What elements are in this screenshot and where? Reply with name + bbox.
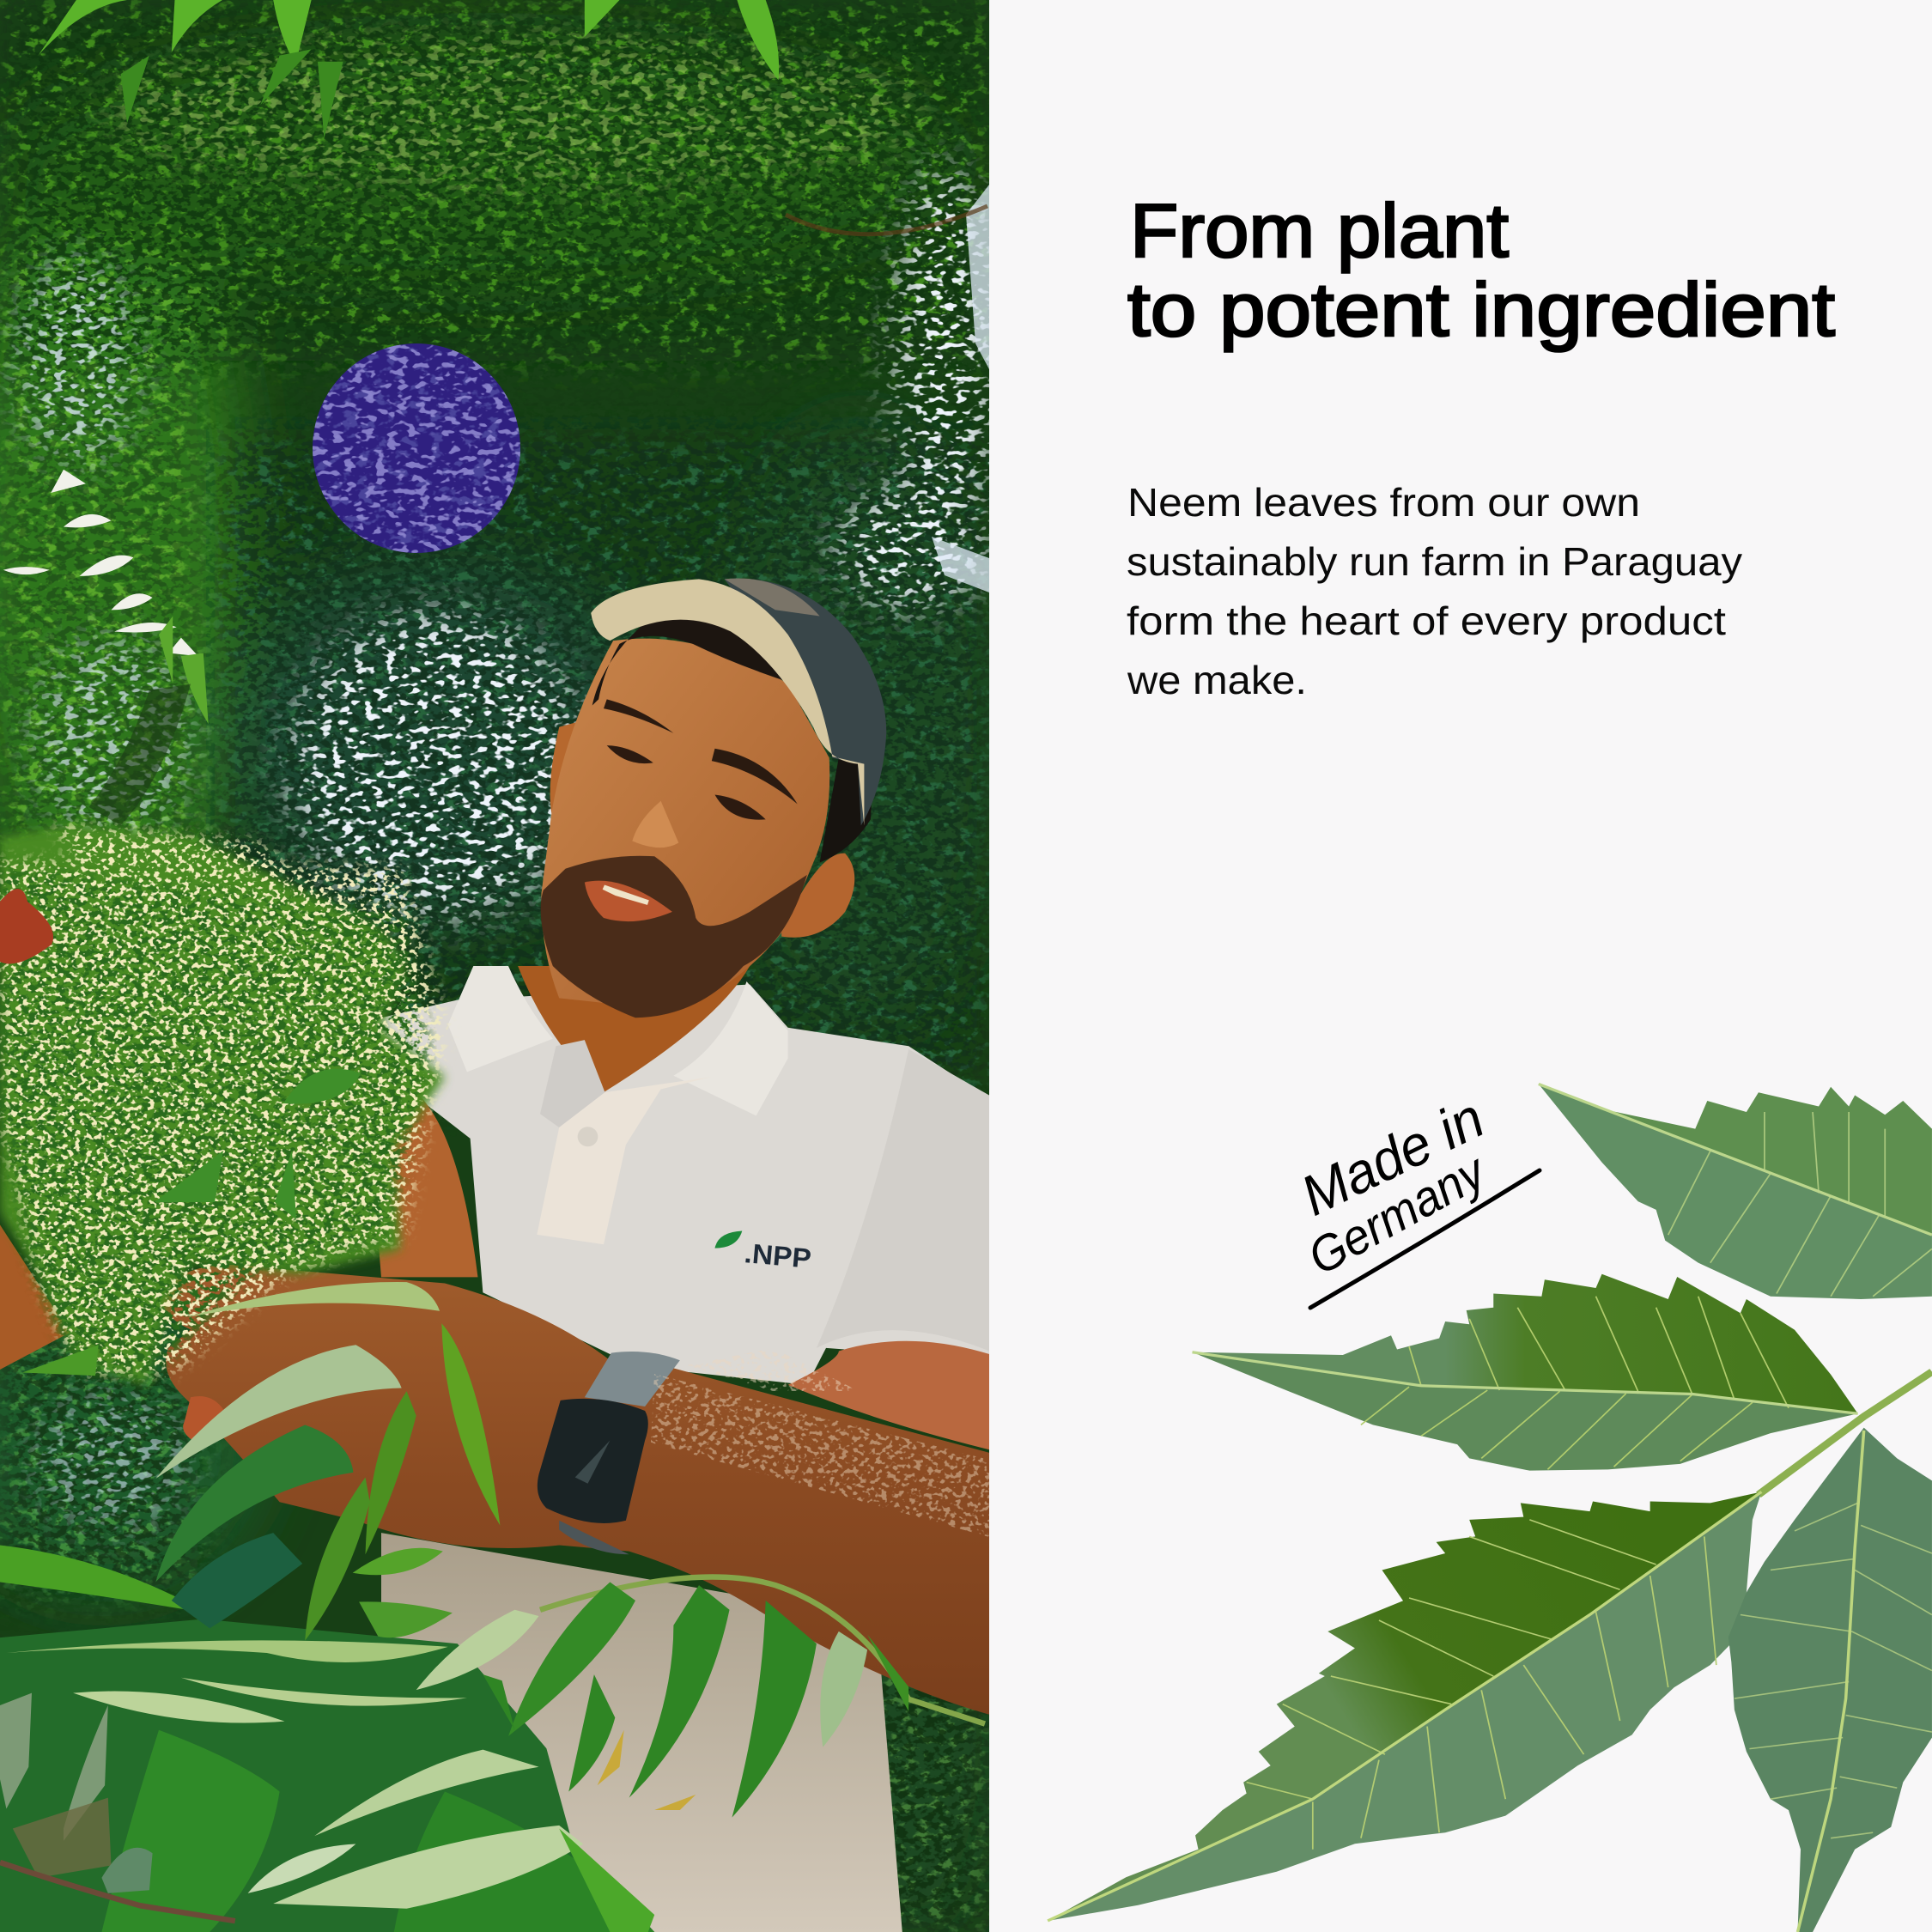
title: to potent ingredient [1127, 267, 1835, 352]
top bright leaves and left white leaves [3, 0, 779, 825]
neck [518, 966, 750, 1092]
face [541, 639, 829, 1011]
man's head with cap [541, 579, 886, 1018]
body text: Neem leaves from our own [1127, 480, 1640, 525]
beard and mouth [541, 856, 807, 1018]
neem leaves illustration [1048, 1084, 1932, 1932]
hanging branch [540, 1577, 985, 1724]
title: From plant [1130, 188, 1509, 273]
cap brim [591, 579, 864, 825]
dark leaf mass [0, 1619, 654, 1932]
handwritten note: Made in Germany: Made in [1291, 1085, 1493, 1228]
cap crown [725, 579, 886, 825]
main arm and hand [159, 1265, 989, 1715]
ear [781, 854, 854, 938]
arm hair highlights [651, 1348, 989, 1537]
purple circle highlight [309, 343, 524, 558]
lower shirt [381, 1533, 902, 1932]
right lower leaf [1728, 1428, 1932, 1932]
bright leaves [0, 1282, 908, 1818]
NPP logo text: .NPP [743, 1237, 812, 1274]
left forearm [0, 1224, 70, 1370]
pale leaves [0, 1610, 654, 1932]
hand behind flowers [286, 1073, 477, 1277]
collar and placket [448, 966, 788, 1244]
red fruit detail [0, 889, 53, 963]
sleeve [817, 1049, 989, 1351]
body text: form the heart of every product [1127, 598, 1726, 643]
foreground neem branches [0, 1282, 985, 1932]
body text: sustainably run farm in Paraguay [1127, 539, 1742, 584]
lower left leaf [1048, 1492, 1761, 1921]
handwritten note: Made in Germany: Germany [1299, 1143, 1497, 1285]
NPP logo on shirt [714, 1231, 742, 1249]
body text: we make. [1127, 658, 1307, 702]
watch [538, 1352, 680, 1554]
eyebrows and eyes [604, 699, 798, 820]
man's shirt, arms and body [0, 966, 989, 1932]
other arm in background [788, 1341, 989, 1449]
panel: photo of farmer harvesting neem [0, 0, 1013, 1932]
flower cluster [0, 824, 447, 1385]
body text [1127, 480, 1742, 702]
hair behind [820, 758, 874, 863]
tree canopy background [0, 0, 1013, 1932]
handwritten note: Made in Germany [1291, 1085, 1540, 1308]
shirt torso [366, 985, 989, 1385]
title [1127, 188, 1835, 352]
top leaf [1539, 1084, 1932, 1299]
middle leaf [1193, 1274, 1858, 1471]
hair [592, 610, 794, 706]
leaf stem [1759, 1372, 1932, 1495]
